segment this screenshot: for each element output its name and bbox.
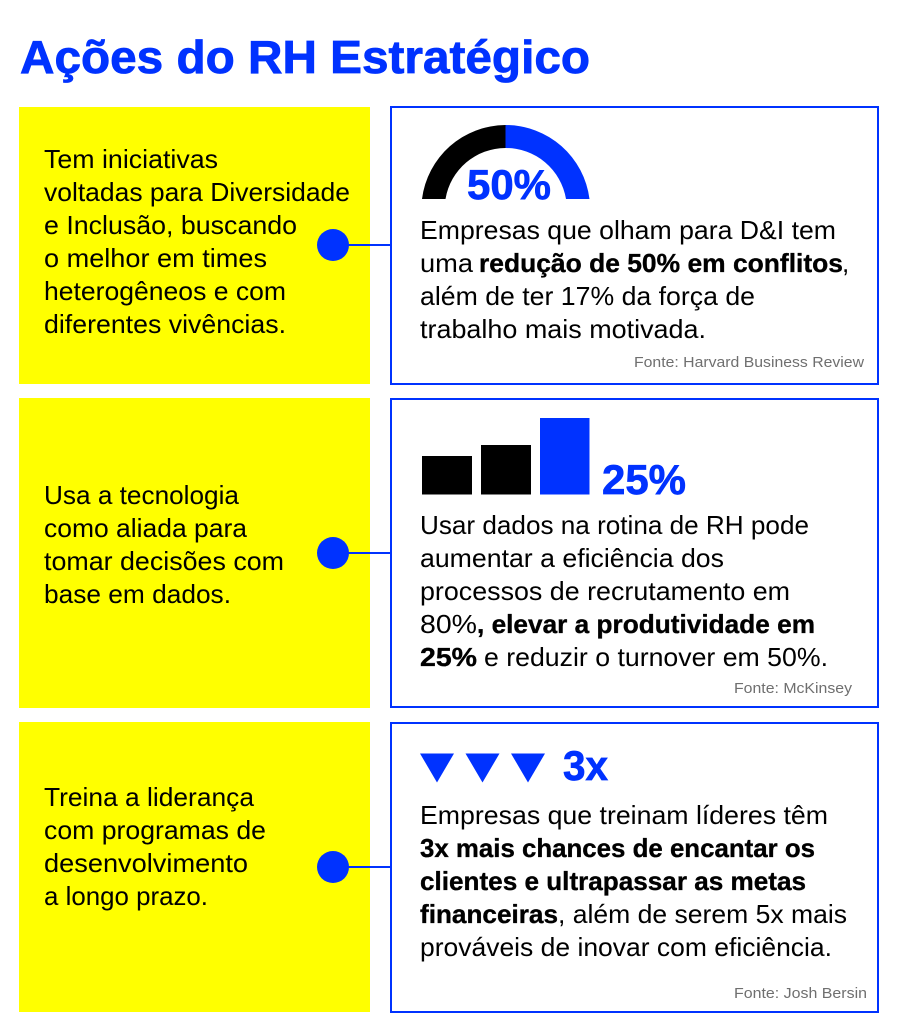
connector dot and line: [317, 851, 391, 883]
body text: technology: 80%: [420, 609, 477, 639]
source: Harvard Business Review: Fonte: Harvard Business Review: [634, 354, 864, 371]
title: Ações do RH Estratégico: [20, 31, 590, 83]
panel: yellow leadership statement: desenvolvimento: [44, 848, 248, 878]
body text: diversity: redução de 50% em conflitos: [479, 248, 843, 278]
body text: diversity: além de ter 17% da força de: [420, 281, 755, 311]
panel: yellow leadership statement: com programas de: [44, 815, 266, 845]
body text: leadership: 3x mais chances de encantar os: [420, 833, 815, 863]
panel: yellow technology statement: como aliada para: [44, 513, 248, 543]
body text: technology: Usar dados na rotina de RH pode: [420, 510, 809, 540]
panel: yellow technology statement: Usa a tecnologia: [44, 480, 240, 510]
body text: technology: e reduzir o turnover em 50%.: [484, 642, 828, 672]
panel: technology data: [391, 399, 878, 707]
body text: leadership: clientes e ultrapassar as metas: [420, 866, 806, 896]
panel: yellow leadership statement: Treina a liderança: [44, 782, 255, 812]
panel: yellow diversity statement: [19, 107, 370, 384]
body text: diversity: [420, 215, 849, 344]
stat: 3x: 3x: [563, 742, 609, 789]
row 3: leadership training: [19, 722, 878, 1012]
panel: yellow diversity statement: diferentes vivências.: [44, 309, 286, 339]
panel: yellow technology statement: tomar decisões com: [44, 546, 284, 576]
body text: technology: [420, 510, 828, 672]
panel: yellow technology statement: base em dados.: [44, 579, 231, 609]
row 1: diversity and inclusion: [19, 107, 878, 384]
body text: technology: , elevar a produtividade em: [477, 609, 815, 639]
panel: yellow diversity statement: e Inclusão, buscando: [44, 210, 297, 240]
panel: yellow diversity statement: heterogêneos e com: [44, 276, 286, 306]
bar chart icon: [422, 418, 590, 494]
body text: leadership: prováveis de inovar com eficiência.: [420, 932, 832, 962]
body text: diversity: uma: [420, 248, 474, 278]
source: McKinsey: Fonte: McKinsey: [734, 680, 853, 697]
body text: leadership: financeiras: [420, 899, 558, 929]
stat: 25%: 25%: [602, 456, 686, 503]
icon: three triangles: [420, 754, 545, 782]
connector dot and line: [317, 229, 391, 261]
panel: yellow diversity statement: voltadas para Diversidade: [44, 177, 350, 207]
panel: yellow diversity statement: Tem iniciativas: [44, 144, 218, 174]
stat: 50%: 50%: [467, 161, 551, 208]
panel: yellow diversity statement: o melhor em times: [44, 243, 267, 273]
source: Josh Bersin: Fonte: Josh Bersin: [734, 985, 867, 1002]
body text: technology: 25%: [420, 642, 477, 672]
panel: yellow leadership statement: [19, 722, 370, 1012]
icon: half gauge: [422, 125, 590, 199]
panel: yellow leadership statement: a longo prazo.: [44, 881, 208, 911]
panel: diversity data: [391, 107, 878, 384]
connector dot and line: [317, 537, 391, 569]
body text: diversity: trabalho mais motivada.: [420, 314, 706, 344]
body text: leadership: , além de serem 5x mais: [558, 899, 847, 929]
body text: technology: aumentar a eficiência dos: [420, 543, 724, 573]
body text: diversity: Empresas que olham para D&I tem: [420, 215, 836, 245]
row 2: technology and data: [19, 398, 878, 708]
panel: yellow technology statement: [19, 398, 370, 708]
body text: leadership: Empresas que treinam líderes têm: [420, 800, 828, 830]
body text: leadership: [420, 800, 847, 962]
body text: diversity: ,: [842, 248, 849, 278]
body text: technology: processos de recrutamento em: [420, 576, 790, 606]
panel: leadership data: [391, 723, 878, 1012]
